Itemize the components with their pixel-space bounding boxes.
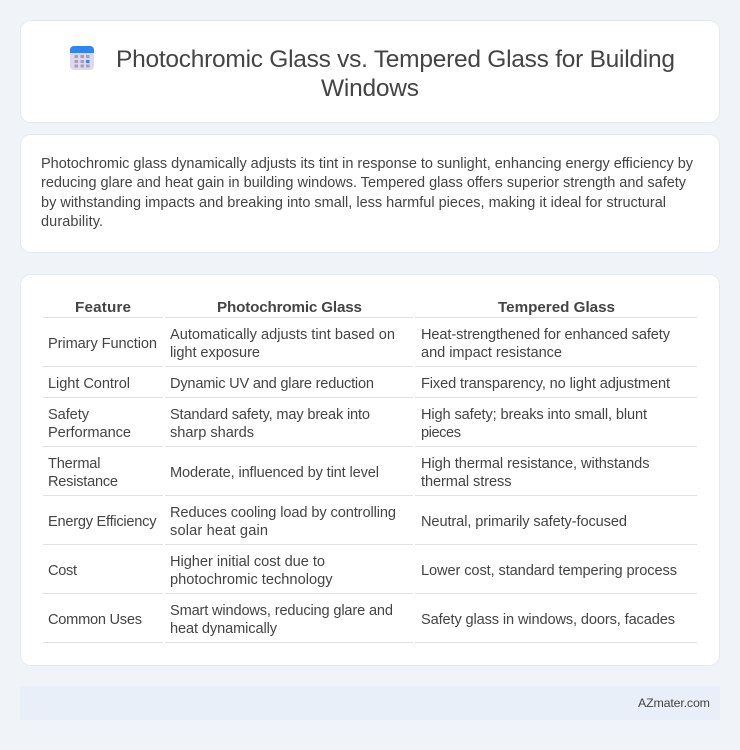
- row: safety performance: High safety; breaks into small, blunt: [421, 407, 647, 423]
- row: common uses: [48, 603, 675, 637]
- icon: calendar: [70, 46, 94, 70]
- text block: description: by withstanding impacts and breaking into small, less harmful pieces, making it ideal for structural: [41, 195, 666, 211]
- row: cost: photochromic technology: [170, 572, 333, 588]
- row: safety performance: sharp shards: [170, 425, 254, 441]
- footer text: AZmater.com: [638, 696, 710, 710]
- row: primary function: Primary Function: [48, 336, 157, 352]
- row: primary function: Automatically adjusts tint based on: [170, 327, 395, 343]
- row: common uses: Smart windows, reducing glare and: [170, 603, 393, 619]
- row: safety performance: Performance: [48, 425, 131, 441]
- row: thermal resistance: [48, 456, 650, 490]
- table header: Photochromic Glass: [217, 299, 362, 316]
- title: Windows: [321, 75, 419, 102]
- title: [116, 46, 675, 102]
- row: safety performance: Standard safety, may break into: [170, 407, 370, 423]
- table header: Feature: [75, 299, 131, 316]
- row: safety performance: [48, 407, 647, 441]
- row: light control: [48, 376, 670, 392]
- table header: Tempered Glass: [498, 299, 615, 316]
- row: safety performance: Safety: [48, 407, 90, 423]
- row: safety performance: pieces: [421, 425, 461, 441]
- text block: description: Photochromic glass dynamically adjusts its tint in response to sunlight, enhancing energy efficiency by: [41, 156, 694, 172]
- row: thermal resistance: High thermal resistance, withstands: [421, 456, 650, 472]
- row: cost: Higher initial cost due to: [170, 554, 325, 570]
- row: light control: Light Control: [48, 376, 130, 392]
- row: energy efficiency: [48, 505, 627, 539]
- row: light control: Fixed transparency, no light adjustment: [421, 376, 670, 392]
- row: primary function: light exposure: [170, 345, 260, 361]
- table header: [75, 299, 615, 316]
- row: primary function: [48, 327, 671, 361]
- row: primary function: and impact resistance: [421, 345, 562, 361]
- panel: title card: [20, 20, 720, 122]
- title: Photochromic Glass vs. Tempered Glass for Building: [116, 46, 675, 73]
- row: common uses: Safety glass in windows, doors, facades: [421, 612, 675, 628]
- text block: description: [41, 156, 694, 230]
- row: thermal resistance: thermal stress: [421, 474, 512, 490]
- row: primary function: Heat-strengthened for enhanced safety: [421, 327, 671, 343]
- row: thermal resistance: Moderate, influenced by tint level: [170, 465, 379, 481]
- row: energy efficiency: Reduces cooling load by controlling: [170, 505, 396, 521]
- row: energy efficiency: Energy Efficiency: [48, 514, 157, 530]
- footer bar: [20, 686, 720, 720]
- row: cost: Cost: [48, 563, 77, 579]
- text block: description: reducing glare and heat gain in building windows. Tempered glass offers superior strength and safety: [41, 175, 687, 191]
- row: light control: Dynamic UV and glare reduction: [170, 376, 374, 392]
- row: common uses: heat dynamically: [170, 621, 278, 637]
- row: thermal resistance: Thermal: [48, 456, 100, 472]
- row: thermal resistance: Resistance: [48, 474, 118, 490]
- row: cost: [48, 554, 677, 588]
- row: energy efficiency: Neutral, primarily safety-focused: [421, 514, 627, 530]
- row: energy efficiency: solar heat gain: [170, 523, 268, 539]
- panel: comparison table: [20, 274, 720, 666]
- text block: description: durability.: [41, 214, 103, 230]
- panel: description card: [20, 134, 720, 252]
- row: cost: Lower cost, standard tempering process: [421, 563, 677, 579]
- row: common uses: Common Uses: [48, 612, 142, 628]
